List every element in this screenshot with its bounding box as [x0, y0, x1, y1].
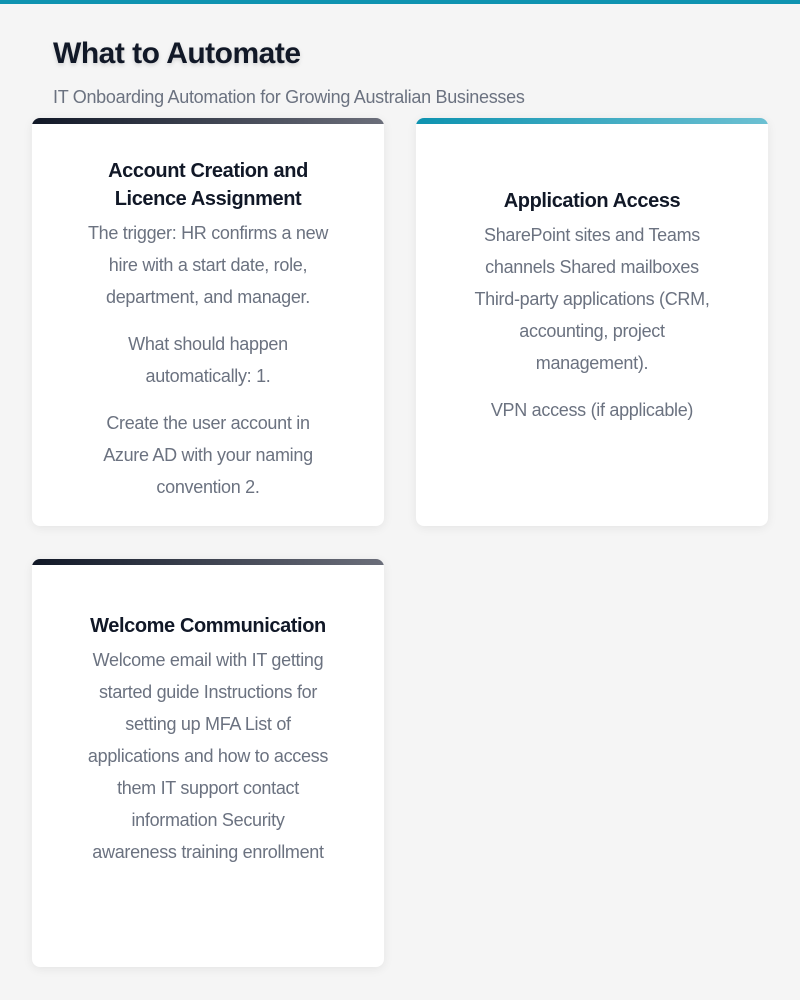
text block: account creation: hire with a start date, role,	[109, 255, 307, 275]
heading: account creation: Licence Assignment	[115, 188, 301, 210]
panel: account creation	[32, 118, 384, 526]
panel: application access	[416, 118, 768, 526]
text block: account creation: What should happen	[128, 334, 288, 354]
text block: application access	[474, 225, 710, 420]
text block: account creation: The trigger: HR confirms a new	[88, 223, 328, 243]
text block: application access: Third-party applications (CRM,	[474, 289, 710, 309]
title: What to Automate	[53, 37, 301, 70]
text block: account creation	[88, 223, 328, 497]
text block: welcome communication: Welcome email with IT getting	[93, 650, 323, 670]
heading: account creation: Account Creation and	[108, 160, 308, 182]
text block: welcome communication: information Security	[131, 810, 285, 830]
text block: welcome communication: them IT support contact	[117, 778, 299, 798]
text block: welcome communication: awareness training enrollment	[92, 842, 324, 862]
text block: application access: SharePoint sites and Teams	[484, 225, 700, 245]
panel: welcome communication	[32, 559, 384, 967]
text block: application access: VPN access (if applicable)	[491, 400, 693, 420]
text block: account creation: Azure AD with your naming	[103, 445, 313, 465]
text block: welcome communication: started guide Instructions for	[99, 682, 317, 702]
top accent bar	[0, 0, 800, 4]
heading: welcome communication: Welcome Communication	[90, 615, 326, 637]
subtitle: IT Onboarding Automation for Growing Australian Businesses	[53, 87, 525, 107]
text block: account creation: Create the user account in	[106, 413, 310, 433]
text block: welcome communication: applications and how to access	[88, 746, 328, 766]
text block: application access: channels Shared mailboxes	[485, 257, 699, 277]
text block: application access: accounting, project	[519, 321, 665, 341]
text block: account creation: convention 2.	[156, 477, 260, 497]
text block: account creation: department, and manager.	[106, 287, 310, 307]
text block: welcome communication: setting up MFA List of	[125, 714, 291, 734]
heading: account creation	[108, 160, 308, 210]
heading: application access: Application Access	[504, 190, 680, 212]
text block: account creation: automatically: 1.	[146, 366, 270, 386]
text block: welcome communication	[88, 650, 328, 862]
text block: application access: management).	[536, 353, 648, 373]
